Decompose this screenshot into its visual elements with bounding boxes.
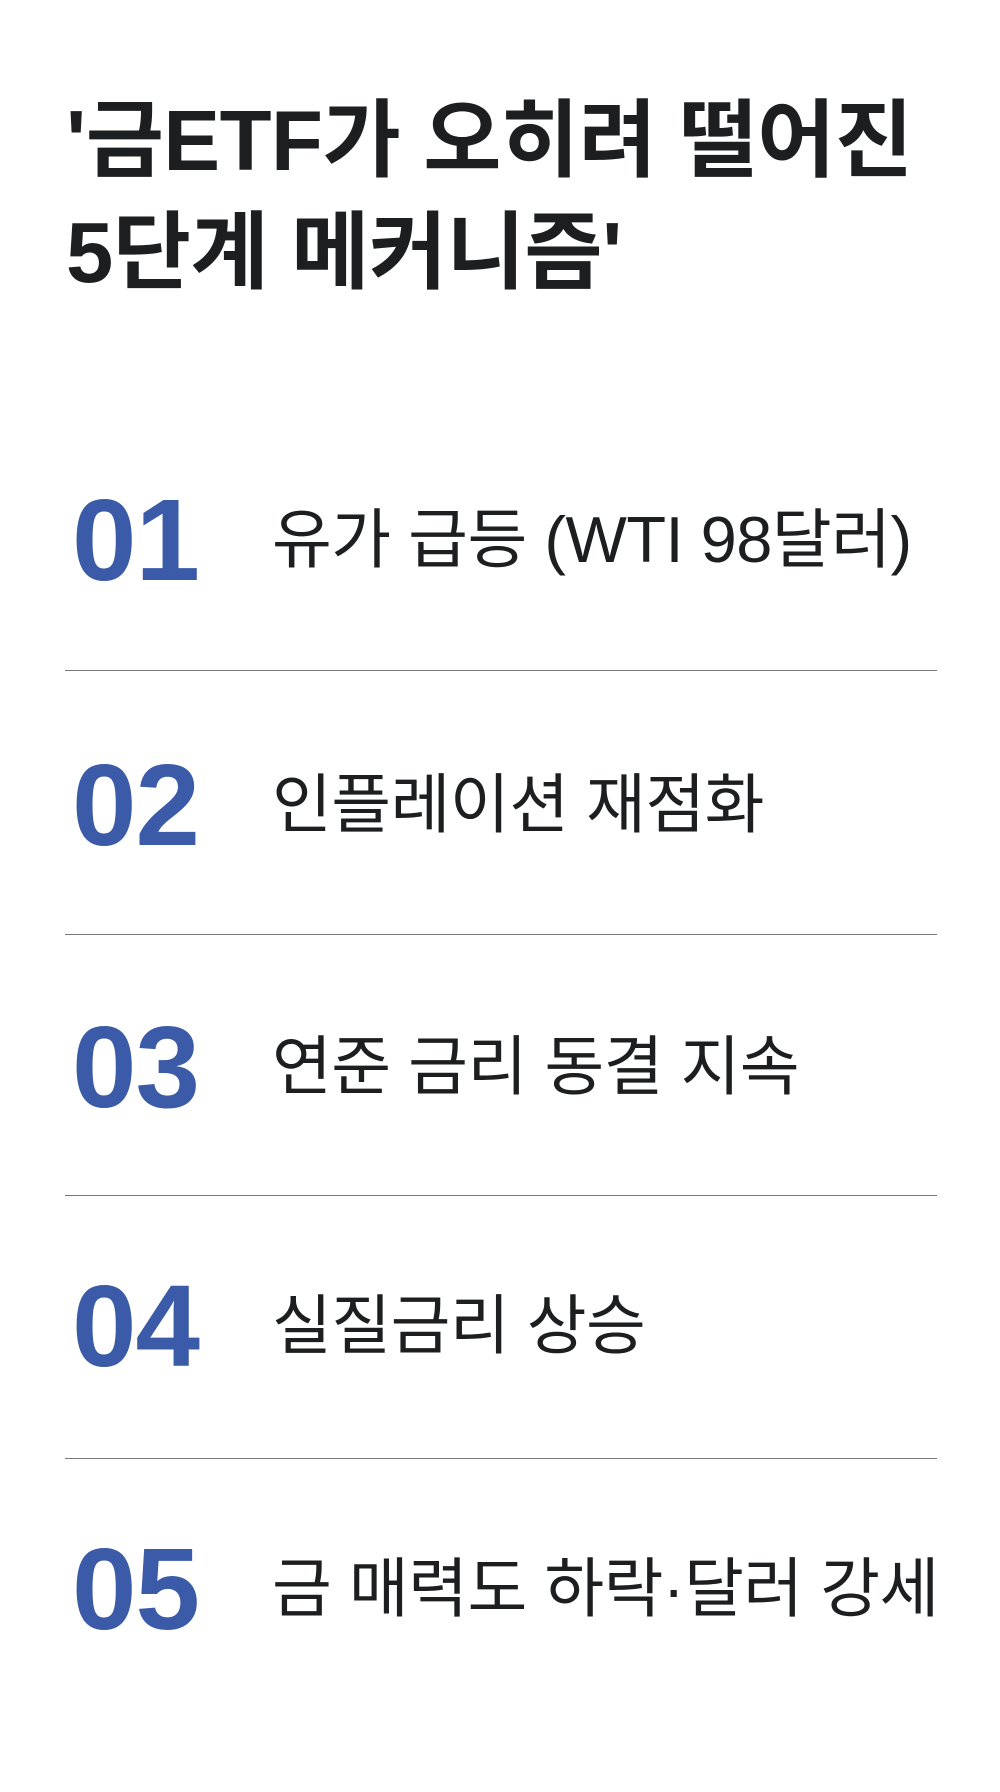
number 05: 05: [72, 1524, 199, 1654]
number 03: 03: [72, 1002, 199, 1132]
text 04: 실질금리 상승: [272, 1289, 645, 1362]
title: 5단계 메커니즘': [66, 206, 622, 301]
number 04: 04: [72, 1261, 199, 1391]
step 05: [72, 1524, 939, 1654]
text 02: 인플레이션 재점화: [272, 768, 764, 841]
text 03: 연준 금리 동결 지속: [272, 1030, 799, 1103]
title: [66, 94, 913, 301]
text 01: 유가 급등 (WTI 98달러): [272, 503, 912, 576]
step 03: [72, 1002, 799, 1132]
step 01: [72, 475, 912, 605]
number 01: 01: [72, 475, 199, 605]
step 02: [72, 740, 764, 870]
number 02: 02: [72, 740, 199, 870]
step 04: [72, 1261, 645, 1391]
title: '금ETF가 오히려 떨어진: [66, 94, 913, 189]
text 05: 금 매력도 하락·달러 강세: [272, 1552, 939, 1625]
